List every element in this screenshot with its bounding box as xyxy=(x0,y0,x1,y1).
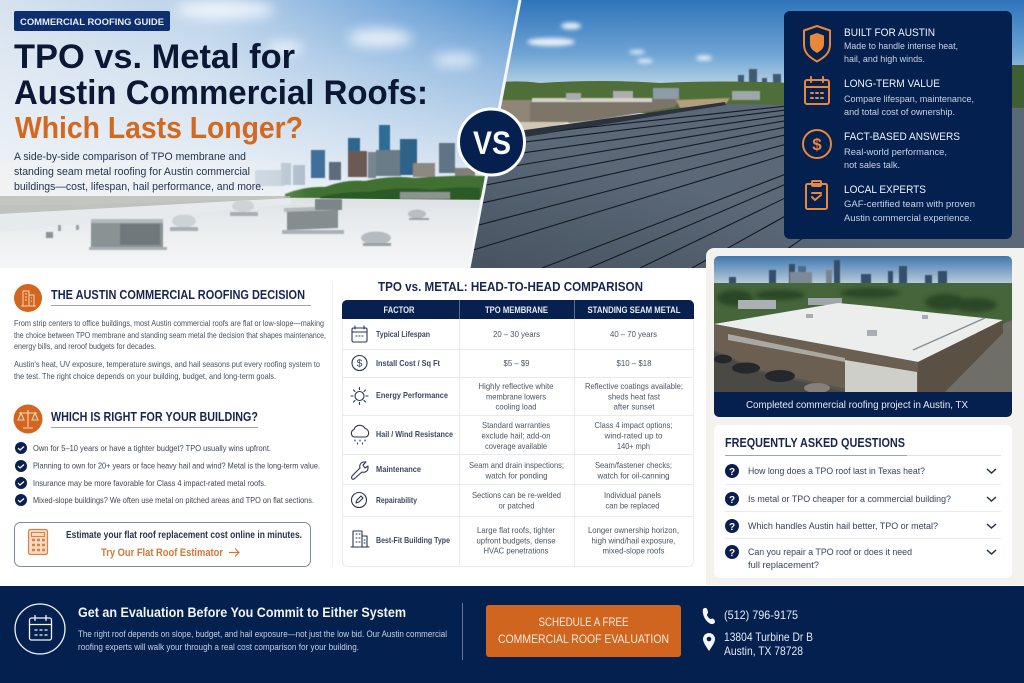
hero subtitle: buildings—cost, lifespan, hail performance, and more. xyxy=(14,181,264,193)
FAQ heading: FREQUENTLY ASKED QUESTIONS xyxy=(725,436,905,450)
benefit: long-term value: LONG-TERM VALUE xyxy=(844,78,940,90)
comparison table xyxy=(342,300,694,566)
CTA button: SCHEDULE A FREE xyxy=(538,615,628,629)
question 1: How long does a TPO roof last in Texas heat? xyxy=(748,466,925,477)
row: hail and wind: Class 4 impact options; xyxy=(594,420,672,430)
benefit: built for Austin xyxy=(844,27,958,65)
row: hail and wind: coverage available xyxy=(485,441,547,451)
benefit: built for Austin: Made to handle intense heat, xyxy=(844,41,958,52)
row: maintenance: Seam/fastener checks; xyxy=(595,460,672,470)
callout: estimator xyxy=(14,522,310,566)
icon: calendar circle xyxy=(15,604,65,654)
benefit: fact-based answers: not sales talk. xyxy=(844,160,900,171)
roof surface xyxy=(0,198,480,270)
row: hail and wind: exclude hail; add-on xyxy=(482,430,551,440)
title: TPO vs. Metal for xyxy=(14,38,295,76)
checklist: Own for 5–10 years or have a tighter budget? TPO usually wins upfront. xyxy=(33,443,271,453)
row: best-fit building type: upfront budgets, dense xyxy=(476,536,556,546)
row: maintenance xyxy=(352,460,672,480)
benefit: local experts: LOCAL EXPERTS xyxy=(844,184,926,196)
row: energy performance: membrane lowers xyxy=(486,392,546,402)
row: hail and wind xyxy=(351,420,672,451)
body text xyxy=(14,318,326,381)
icon: building badge xyxy=(14,284,42,312)
icon: phone xyxy=(703,608,715,624)
heading: WHICH IS RIGHT FOR YOUR BUILDING? xyxy=(51,410,258,424)
callout: estimator: Try Our Flat Roof Estimator xyxy=(101,547,224,559)
icon: shield xyxy=(804,26,830,62)
address xyxy=(724,630,813,658)
question 2 xyxy=(725,492,996,506)
parking lots xyxy=(714,335,972,392)
hero photo: TPO roof and Austin skyline xyxy=(0,0,530,270)
icon: location pin xyxy=(703,633,715,651)
benefit: local experts: GAF-certified team with proven xyxy=(844,199,975,210)
question 3: ? xyxy=(729,522,735,533)
row: install cost xyxy=(352,356,652,370)
row: typical lifespan xyxy=(352,326,657,342)
footer heading: Get an Evaluation Before You Commit to Either System xyxy=(78,604,406,620)
VS badge xyxy=(458,109,524,175)
title xyxy=(14,38,428,145)
question 2: Is metal or TPO cheaper for a commercial building? xyxy=(748,494,951,505)
phone number: (512) 796-9175 xyxy=(724,608,798,622)
body text: the test. The right choice depends on your building, budget, and long-term goals. xyxy=(14,371,276,381)
CTA button xyxy=(486,605,681,657)
checklist: Planning to own for 20+ years or face heavy hail and wind? Metal is the long-term value. xyxy=(33,460,320,470)
icon: dollar xyxy=(803,130,831,158)
icon: calendar xyxy=(805,77,829,104)
hero subtitle: A side-by-side comparison of TPO membrane and xyxy=(14,151,246,163)
panel: Austin roofing decision xyxy=(14,284,326,381)
VS badge: VS xyxy=(473,125,511,161)
arrow xyxy=(229,548,239,556)
benefit: long-term value: Compare lifespan, maintenance, xyxy=(844,94,974,105)
hero subtitle xyxy=(14,151,264,193)
row: energy performance: cooling load xyxy=(496,402,537,412)
table header: TPO MEMBRANE xyxy=(485,305,548,315)
row: repairability: Repairability xyxy=(376,496,417,505)
row: repairability: Sections can be re-welded xyxy=(472,490,561,500)
icon: dollar: $ xyxy=(812,135,822,154)
benefit: long-term value: and total cost of ownership. xyxy=(844,107,955,118)
title: Which Lasts Longer? xyxy=(15,110,303,145)
footer body text xyxy=(78,629,447,652)
row: install cost: $5 – $9 xyxy=(504,358,530,368)
question 1: ? xyxy=(729,467,735,478)
heading: THE AUSTIN COMMERCIAL ROOFING DECISION xyxy=(51,288,305,302)
table header: STANDING SEAM METAL xyxy=(588,305,681,315)
row: install cost: Install Cost / Sq Ft xyxy=(376,359,440,368)
benefit: fact-based answers xyxy=(844,131,960,171)
body text: Austin's heat, UV exposure, temperature swings, and hail seasons put every roofing system to xyxy=(14,359,320,369)
question 4 xyxy=(725,545,996,571)
row: repairability: or patched xyxy=(498,500,535,510)
question 3: Which handles Austin hail better, TPO or metal? xyxy=(748,521,938,532)
benefit: fact-based answers: FACT-BASED ANSWERS xyxy=(844,131,960,143)
question 4: Can you repair a TPO roof or does it need xyxy=(748,547,912,558)
checklist: Insurance may be more favorable for Class 4 impact-rated metal roofs. xyxy=(33,478,266,488)
title: Austin Commercial Roofs: xyxy=(14,74,428,112)
row: install cost: $10 – $18 xyxy=(616,358,652,368)
icon: calculator xyxy=(28,530,48,554)
row: best-fit building type: Large flat roofs, tighter xyxy=(477,525,555,535)
row: hail and wind: wind-rated up to xyxy=(604,430,663,440)
building front wall xyxy=(714,324,918,392)
row: energy performance: Reflective coatings available; xyxy=(585,381,683,391)
question 1 xyxy=(725,464,996,478)
hero subtitle: standing seam metal roofing for Austin commercial xyxy=(14,166,250,178)
row: maintenance: watch for ponding xyxy=(485,470,548,480)
benefit: built for Austin: BUILT FOR AUSTIN xyxy=(844,27,935,39)
caption bar xyxy=(714,392,1012,417)
row: maintenance: Seam and drain inspections; xyxy=(469,460,564,470)
row: best-fit building type: mixed-slope roofs xyxy=(602,546,664,556)
footer body text: The right roof depends on slope, budget, and hail exposure—not just the low bid. Our Austin commercial xyxy=(78,629,447,639)
icon: scales badge xyxy=(14,404,42,434)
row: repairability: can be replaced xyxy=(606,500,660,510)
address: 13804 Turbine Dr B xyxy=(724,630,813,644)
checklist: Mixed-slope buildings? We often use metal on pitched areas and TPO on flat sections. xyxy=(33,495,314,505)
project photo with caption xyxy=(714,256,1012,417)
table header: FACTOR xyxy=(384,305,415,315)
VS divider line xyxy=(469,0,520,268)
row: repairability xyxy=(352,490,661,510)
benefit: fact-based answers: Real-world performance, xyxy=(844,147,947,158)
row: hail and wind: Standard warranties xyxy=(482,420,550,430)
footer call to action xyxy=(0,586,1024,683)
row: typical lifespan: 40 – 70 years xyxy=(610,329,657,339)
neighbouring buildings xyxy=(500,100,532,123)
row: hail and wind: 140+ mph xyxy=(617,441,650,451)
panel: FAQ xyxy=(714,425,1012,578)
row: best-fit building type: HVAC penetrations xyxy=(484,546,548,556)
HVAC units xyxy=(91,220,163,247)
body text: From strip centers to office buildings, most Austin commercial roofs are flat or low-slope—making xyxy=(14,318,324,328)
benefit: built for Austin: hail, and high winds. xyxy=(844,54,925,65)
row: energy performance xyxy=(351,381,683,412)
comparison heading: TPO vs. METAL: HEAD-TO-HEAD COMPARISON xyxy=(378,280,643,294)
address: Austin, TX 78728 xyxy=(724,644,803,658)
panel: benefits xyxy=(784,11,1012,239)
row: maintenance: Maintenance xyxy=(376,465,421,474)
distant buildings xyxy=(255,125,475,186)
row: typical lifespan: Typical Lifespan xyxy=(376,330,430,339)
row: best-fit building type: high wind/hail exposure, xyxy=(592,536,676,546)
row: energy performance: Energy Performance xyxy=(376,391,448,400)
tree line xyxy=(285,176,485,198)
hero photo: standing seam metal roof xyxy=(460,0,1024,270)
CTA button: COMMERCIAL ROOF EVALUATION xyxy=(498,632,669,646)
body text: energy bills, and reroof budgets for decades. xyxy=(14,341,156,351)
benefit: long-term value xyxy=(844,78,974,118)
row: repairability: Individual panels xyxy=(604,490,661,500)
row: install cost: $ xyxy=(357,358,363,370)
eyebrow badge xyxy=(14,11,170,31)
caption bar: Completed commercial roofing project in Austin, TX xyxy=(746,399,968,411)
panel: right column background xyxy=(706,248,1024,585)
benefit: local experts: Austin commercial experience. xyxy=(844,213,972,224)
row: energy performance: after sunset xyxy=(614,402,655,412)
row: energy performance: Highly reflective white xyxy=(478,381,554,391)
checklist xyxy=(15,442,320,506)
panel: which is right xyxy=(14,404,320,566)
row: energy performance: sheds heat fast xyxy=(608,392,661,402)
row: best-fit building type: Best-Fit Building Type xyxy=(376,536,450,545)
white roof xyxy=(714,303,1003,362)
body text: the choice between TPO membrane and standing seam metal the decision that shapes maintenance, xyxy=(14,330,326,340)
question 4: full replacement? xyxy=(748,560,819,571)
icon: clipboard xyxy=(806,181,827,209)
row: best-fit building type xyxy=(351,525,679,556)
table header xyxy=(342,300,694,319)
eyebrow badge: COMMERCIAL ROOFING GUIDE xyxy=(20,17,165,28)
row: maintenance: watch for oil-canning xyxy=(597,470,670,480)
row: hail and wind: Hail / Wind Resistance xyxy=(376,430,453,439)
benefit: local experts xyxy=(844,184,975,224)
row: typical lifespan: 20 – 30 years xyxy=(493,329,540,339)
row: best-fit building type: Longer ownership horizon, xyxy=(588,525,679,535)
question 3 xyxy=(725,519,996,533)
footer body text: roofing experts will walk your through a real cost comparison for your building. xyxy=(78,642,359,652)
callout: estimator: Estimate your flat roof replacement cost online in minutes. xyxy=(66,530,302,541)
question 4: ? xyxy=(729,548,735,559)
question 2: ? xyxy=(729,495,735,506)
